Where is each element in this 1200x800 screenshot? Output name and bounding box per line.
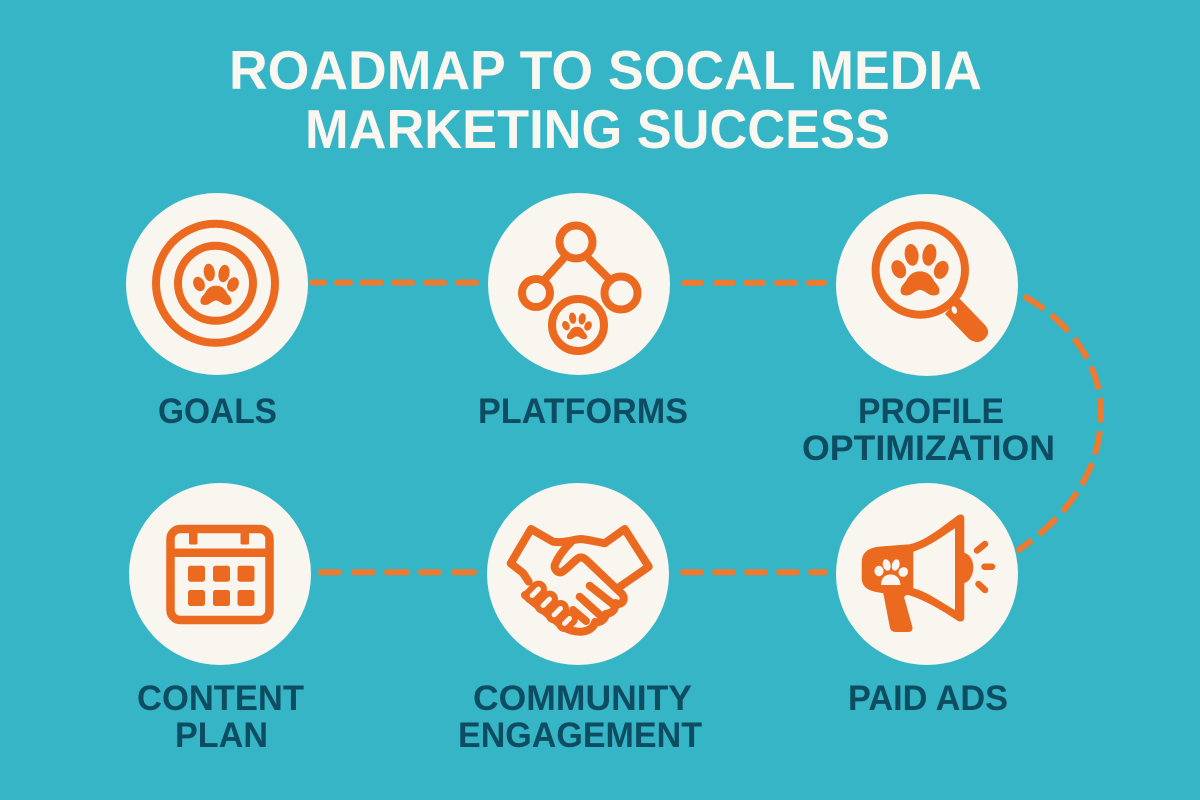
node circle [126, 193, 308, 375]
label second line: ENGAGEMENT [458, 715, 702, 755]
node circle [836, 194, 1018, 376]
step: profile optimization [802, 194, 1055, 468]
node circle [487, 483, 669, 665]
icon: connected network with paw [522, 226, 638, 352]
node circle [488, 193, 670, 375]
node circle [129, 483, 311, 665]
title: MARKETING SUCCESS [305, 98, 890, 160]
icon: handshake [511, 529, 649, 632]
icon: calendar [170, 529, 270, 620]
icon: magnifier with paw [876, 225, 988, 342]
label: PLATFORMS [478, 391, 688, 431]
label: COMMUNITY [473, 678, 692, 718]
label second line: OPTIMIZATION [802, 428, 1055, 468]
label: PROFILE [858, 391, 1004, 431]
step: content plan [129, 483, 311, 755]
connector: goals to platforms [312, 280, 476, 286]
title [229, 39, 982, 160]
icon: megaphone with paw [862, 514, 992, 632]
step: goals [126, 193, 308, 431]
label: PAID ADS [848, 678, 1008, 718]
step: paid ads [836, 483, 1018, 718]
node circle [836, 483, 1018, 665]
connector: profile optimization to paid ads [1017, 296, 1101, 551]
connector: community engagement to content plan [321, 569, 474, 575]
label: CONTENT [137, 678, 304, 718]
icon: target with paw [156, 224, 275, 343]
title: ROADMAP TO SOCAL MEDIA [229, 39, 982, 101]
step: platforms [478, 193, 688, 431]
label second line: PLAN [175, 715, 268, 755]
connector: platforms to profile optimization [684, 280, 824, 286]
connector: paid ads to community engagement [683, 569, 825, 575]
step: community engagement [458, 483, 702, 755]
label: GOALS [158, 391, 277, 431]
